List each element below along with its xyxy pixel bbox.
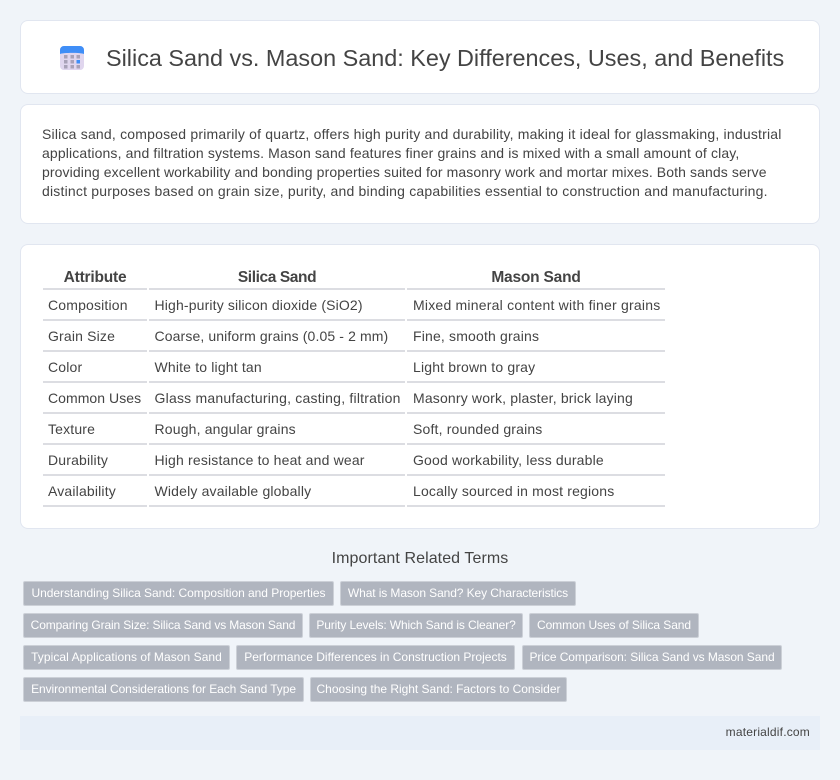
title: Silica Sand vs. Mason Sand: Key Differences, Uses, and Benefits bbox=[106, 45, 784, 71]
comparison table: Attribute bbox=[64, 269, 126, 286]
comparison table: Texture bbox=[48, 421, 95, 437]
related term tags: Price Comparison: Silica Sand vs Mason Sand bbox=[529, 650, 775, 664]
comparison table: Mason Sand bbox=[491, 269, 581, 286]
comparison table: Composition bbox=[48, 297, 128, 313]
related term tags: Understanding Silica Sand: Composition and Properties bbox=[31, 586, 326, 600]
related term tags: Common Uses of Silica Sand bbox=[537, 618, 691, 632]
related term tags bbox=[23, 581, 782, 702]
comparison table: Good workability, less durable bbox=[413, 452, 604, 468]
comparison table: Grain Size bbox=[48, 328, 115, 344]
comparison table: Durability bbox=[48, 452, 108, 468]
comparison table: Locally sourced in most regions bbox=[413, 483, 614, 499]
intro text: providing excellent workability and bonding properties suited for masonry work and mortar mixes. Both sands serve bbox=[42, 164, 767, 180]
comparison table: Silica Sand bbox=[238, 269, 316, 286]
comparison table: High resistance to heat and wear bbox=[154, 452, 365, 468]
intro text bbox=[42, 126, 782, 199]
comparison table: Coarse, uniform grains (0.05 - 2 mm) bbox=[154, 328, 388, 344]
comparison table: Mixed mineral content with finer grains bbox=[413, 297, 660, 313]
comparison table: Rough, angular grains bbox=[154, 421, 296, 437]
heading: related terms: Important Related Terms bbox=[332, 550, 508, 567]
comparison table: Availability bbox=[48, 483, 116, 499]
comparison table: Masonry work, plaster, brick laying bbox=[413, 390, 633, 406]
comparison table: Common Uses bbox=[48, 390, 141, 406]
comparison table: Soft, rounded grains bbox=[413, 421, 542, 437]
related term tags: Purity Levels: Which Sand is Cleaner? bbox=[316, 618, 516, 632]
related term tags: Environmental Considerations for Each Sand Type bbox=[31, 682, 296, 696]
comparison table: Glass manufacturing, casting, filtration bbox=[154, 390, 401, 406]
comparison table: Widely available globally bbox=[154, 483, 311, 499]
comparison table: Light brown to gray bbox=[413, 359, 535, 375]
intro text: applications, and filtration systems. Mason sand features finer grains and is mixed with a small amount of clay, bbox=[42, 145, 739, 161]
comparison table bbox=[43, 269, 665, 507]
footer source: materialdif.com bbox=[726, 725, 810, 739]
panel: introduction bbox=[20, 104, 820, 224]
comparison table: Color bbox=[48, 359, 82, 375]
panel: title header bbox=[20, 20, 820, 94]
intro text: distinct purposes based on grain size, purity, and binding capabilities essential to construction and manufacturing. bbox=[42, 183, 768, 199]
related term tags: Performance Differences in Construction Projects bbox=[244, 650, 507, 664]
footer bar bbox=[20, 716, 820, 750]
related term tags: Choosing the Right Sand: Factors to Consider bbox=[317, 682, 560, 696]
intro text: Silica sand, composed primarily of quartz, offers high purity and durability, making it ideal for glassmaking, industrial bbox=[42, 126, 782, 142]
icon: calendar bbox=[60, 46, 84, 70]
related term tags: Comparing Grain Size: Silica Sand vs Mason Sand bbox=[31, 618, 295, 632]
comparison table: Fine, smooth grains bbox=[413, 328, 539, 344]
related term tags: Typical Applications of Mason Sand bbox=[31, 650, 222, 664]
comparison table: White to light tan bbox=[154, 359, 262, 375]
related term tags: What is Mason Sand? Key Characteristics bbox=[348, 586, 568, 600]
comparison table: High-purity silicon dioxide (SiO2) bbox=[154, 297, 363, 313]
panel: comparison table bbox=[20, 244, 820, 529]
